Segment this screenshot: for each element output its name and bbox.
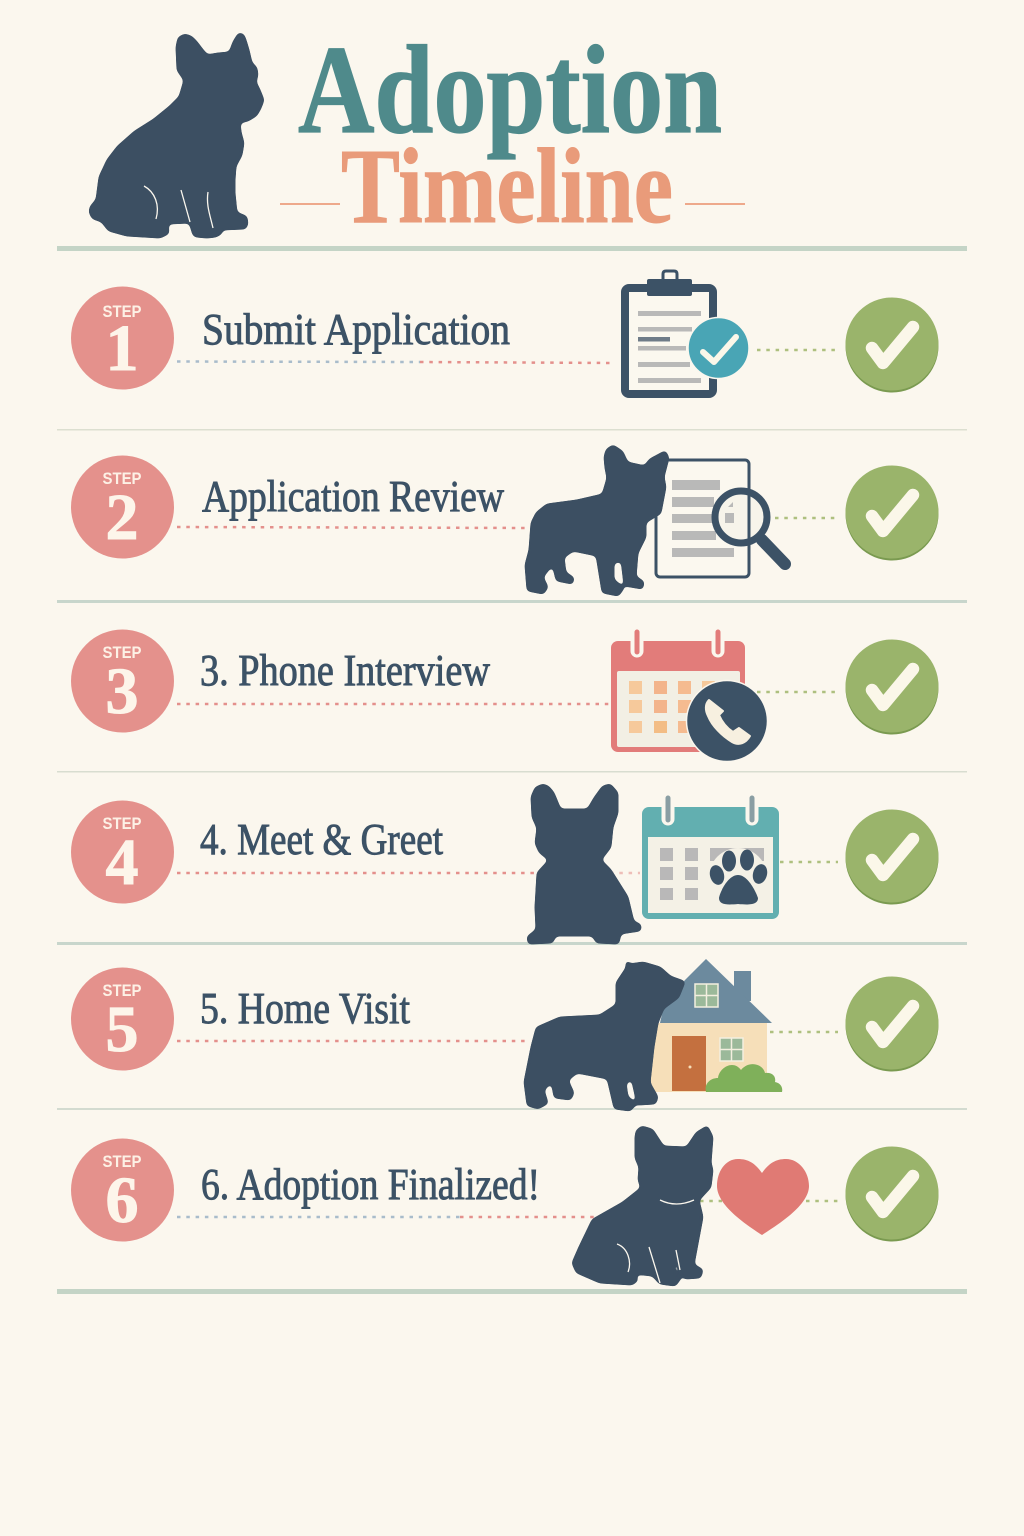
step 4 label: 4. Meet & Greet <box>200 815 443 864</box>
icon: house <box>650 959 782 1092</box>
step 2 badge: 2 <box>106 481 138 554</box>
paw print <box>708 848 769 906</box>
step 5 badge: 5 <box>106 993 138 1066</box>
connector lines <box>177 1201 838 1217</box>
step 6 badge: 6 <box>106 1164 138 1237</box>
row 6: adoption finalized <box>71 1127 938 1285</box>
step 2 badge: STEP <box>102 469 142 488</box>
connector lines <box>177 518 838 528</box>
icon: document and magnifier <box>656 460 785 577</box>
step 4 badge: STEP <box>102 814 142 833</box>
step 5 badge <box>71 968 174 1070</box>
row 2: application review <box>71 446 938 595</box>
step 1 badge <box>71 286 174 390</box>
completed check <box>846 298 938 392</box>
connector lines <box>177 1032 838 1041</box>
dog front-facing silhouette <box>528 785 640 943</box>
step 6 badge <box>71 1138 174 1242</box>
title accent dashes <box>280 203 745 205</box>
completed check <box>846 466 938 560</box>
completed check <box>846 640 938 734</box>
title <box>280 21 745 246</box>
icon: heart <box>717 1159 809 1235</box>
connector lines <box>177 862 838 873</box>
connector lines <box>177 350 838 363</box>
row 4: meet and greet <box>71 785 938 943</box>
icon: calendar with phone <box>611 632 768 762</box>
step 4 badge <box>71 800 174 904</box>
icon: calendar with paw <box>642 798 779 919</box>
step 5 badge: STEP <box>102 981 142 1000</box>
step 1 badge: STEP <box>102 302 142 321</box>
completed check <box>846 976 938 1072</box>
header dog silhouette <box>90 34 263 237</box>
step 2 badge <box>71 456 174 558</box>
step 1 label: Submit Application <box>202 305 510 354</box>
dog standing silhouette <box>526 446 668 595</box>
step 1 badge: 1 <box>106 312 138 385</box>
title word: Adoption: Adoption <box>298 21 722 160</box>
row 5: home visit <box>71 959 938 1110</box>
step 3 badge <box>71 630 174 732</box>
step 2 label: Application Review <box>202 472 504 521</box>
dog sitting silhouette <box>573 1127 712 1285</box>
step 3 badge: 3 <box>106 655 138 728</box>
row 1: submit application <box>71 271 938 394</box>
step 6 label: 6. Adoption Finalized! <box>201 1160 540 1209</box>
icon: clipboard with check <box>625 271 749 394</box>
step 3 badge: STEP <box>102 643 142 662</box>
completed check <box>846 810 938 904</box>
dividers <box>57 246 967 1294</box>
step 4 badge: 4 <box>106 826 138 899</box>
row 3: phone interview <box>71 630 938 762</box>
step 3 label: 3. Phone Interview <box>200 646 490 695</box>
phone handset <box>706 700 750 744</box>
title word: Timeline: Timeline <box>341 128 673 246</box>
connector lines <box>177 692 838 704</box>
step 5 label: 5. Home Visit <box>200 984 410 1033</box>
dog profile silhouette <box>525 962 684 1110</box>
step 6 badge: STEP <box>102 1152 142 1171</box>
completed check <box>846 1146 938 1242</box>
